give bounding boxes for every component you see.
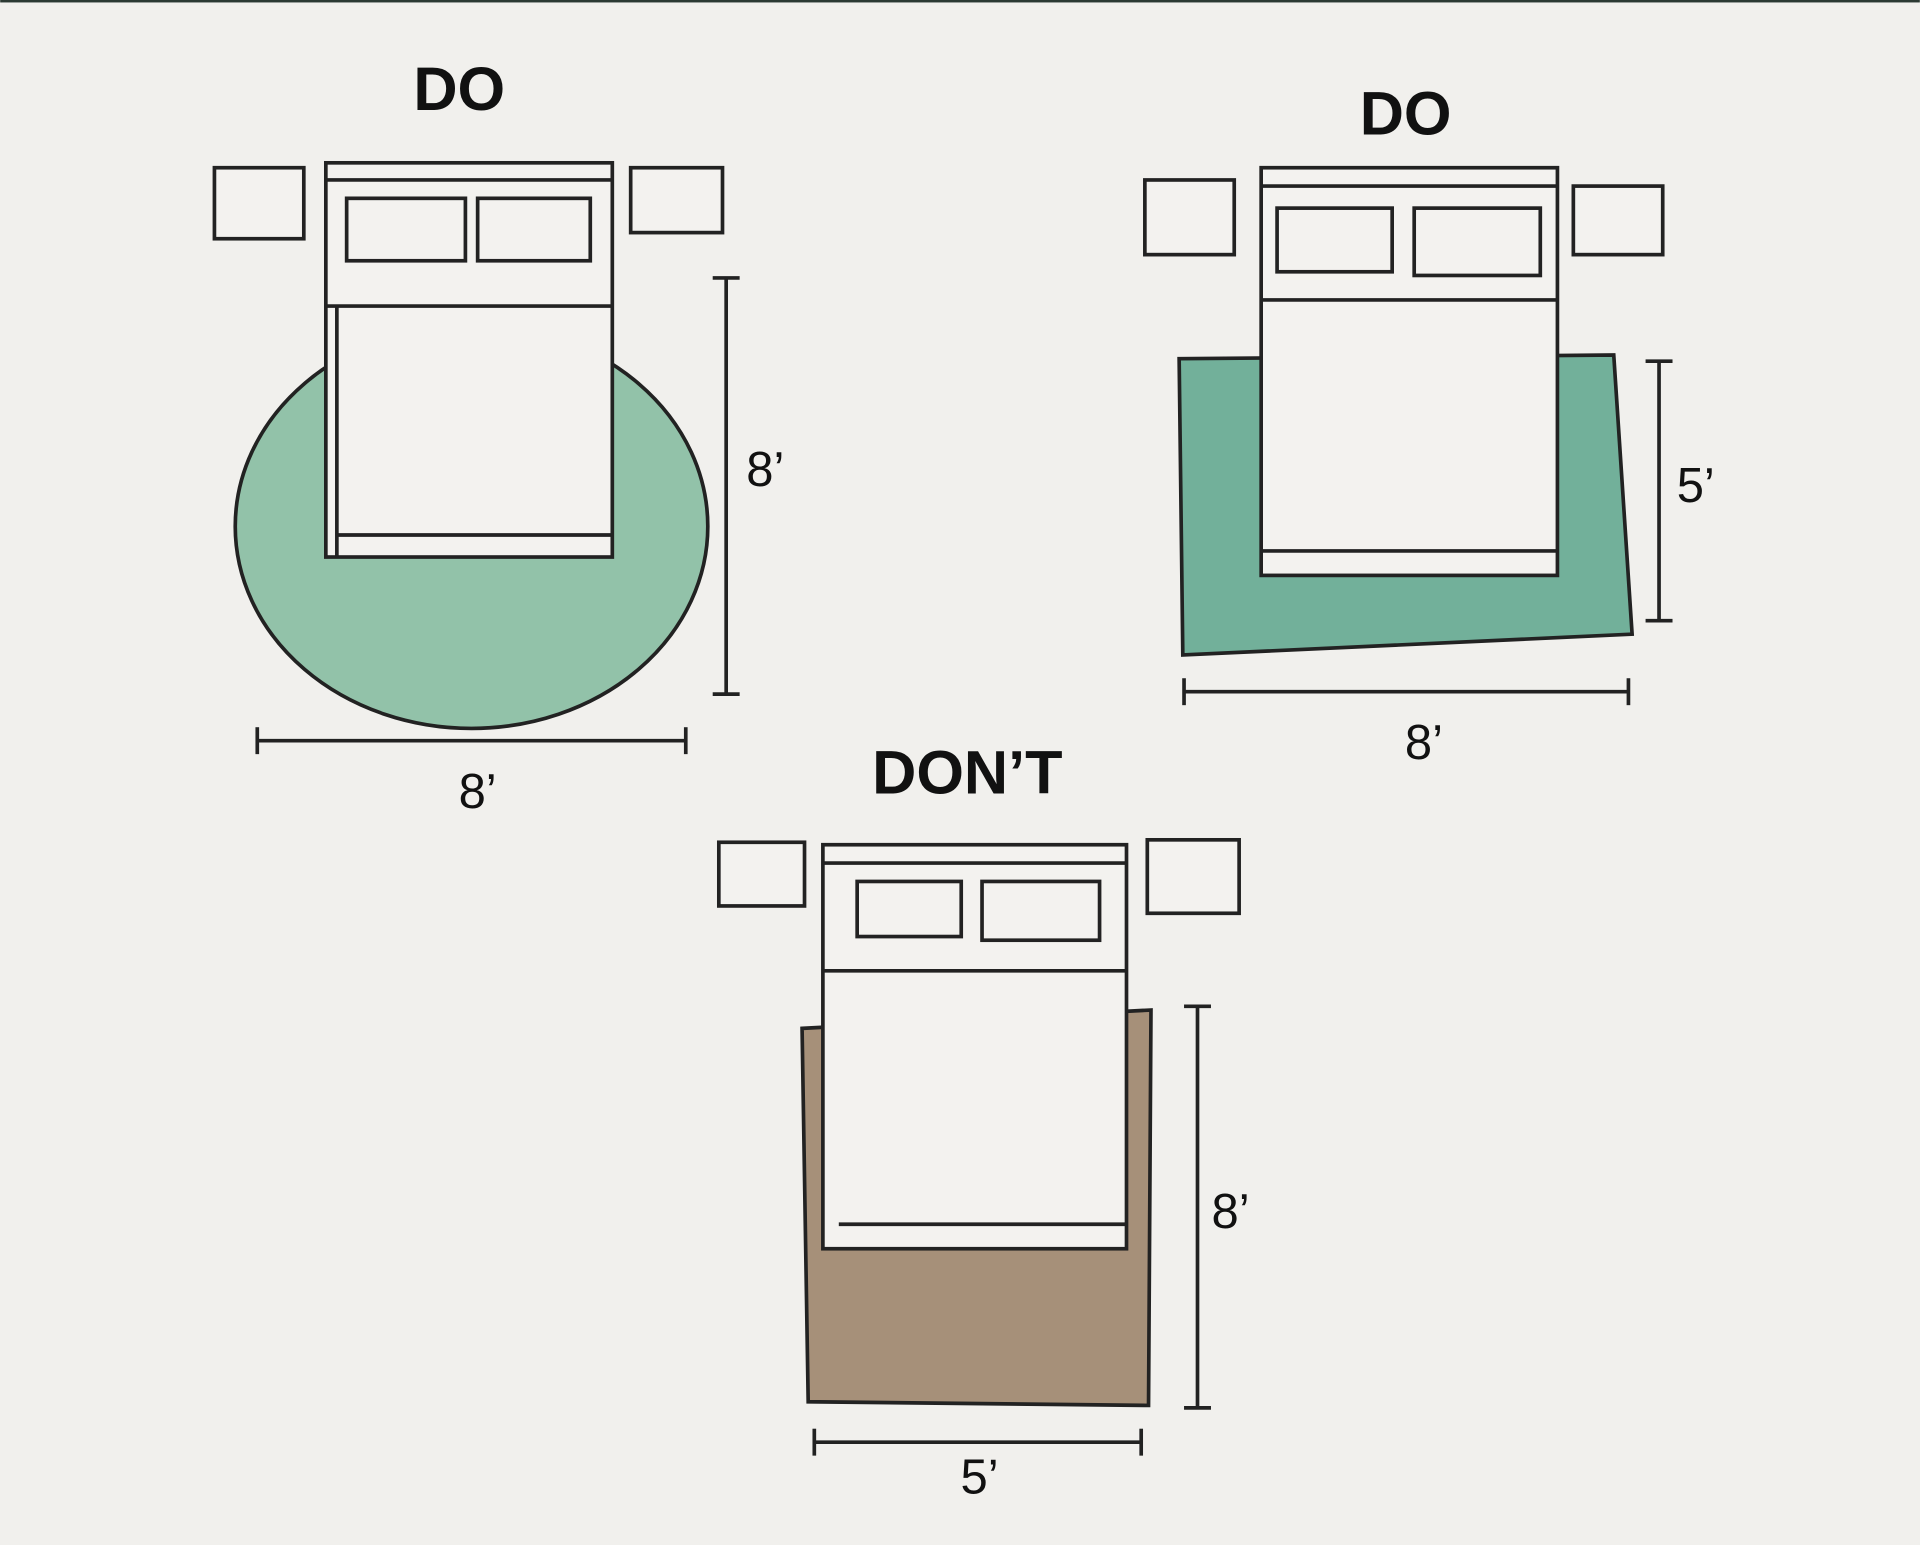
panel: dont narrow rug [719, 738, 1250, 1505]
round rug [235, 324, 708, 728]
dimension: horizontal 8: 8’ [1405, 716, 1443, 770]
dimension: horizontal 8: 8’ [459, 765, 497, 819]
bed [1261, 168, 1557, 575]
rectangular rug [1179, 355, 1632, 655]
dimension: vertical 8: 8’ [746, 443, 784, 497]
heading: DO left: DO [413, 55, 505, 123]
nightstands [719, 840, 1239, 913]
panel: do rectangular rug [1145, 80, 1715, 770]
bed [823, 845, 1126, 1249]
nightstands [214, 168, 722, 239]
dimension: vertical 5: 5’ [1677, 459, 1715, 513]
dimension: horizontal 5: 5’ [961, 1451, 999, 1505]
nightstands [1145, 180, 1663, 255]
panel: do round rug [214, 55, 784, 819]
bed [326, 163, 612, 557]
dimension: vertical 8: 8’ [1212, 1185, 1250, 1239]
heading: DO right: DO [1360, 80, 1452, 148]
narrow rug [802, 1010, 1151, 1405]
heading: DON'T: DON’T [872, 738, 1063, 806]
